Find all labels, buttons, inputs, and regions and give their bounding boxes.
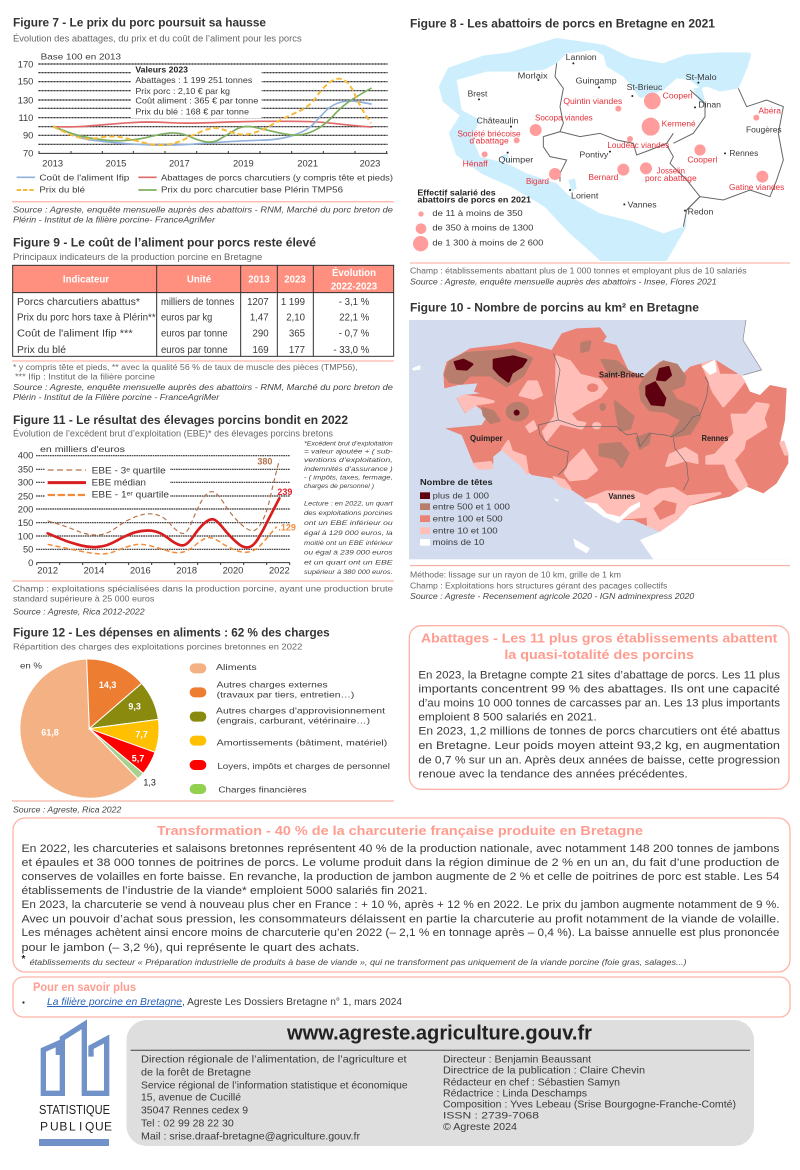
- map: abattoirs: Abéra: [758, 106, 781, 116]
- legend: nombre de têtes: plus de 1 000: [433, 490, 489, 500]
- heading: figure 12: Figure 12 - Les dépenses en aliments : 62 % des charges: [13, 626, 330, 640]
- footnote: transformation: établissements du secteur « Préparation industrielle de produits à base de viande », qui ne transforment pas uniquement de la viande porcine (foie gras, salages...): [30, 958, 687, 967]
- text block: abattages: importants concentrent 99 % des abattages. Ils ont une capacité: [418, 684, 780, 696]
- text block: crédits: ISSN : 2739-7068: [443, 1111, 539, 1122]
- map: abattoirs: Cooperl: [687, 154, 717, 164]
- notes: figure 11: Champ : exploitations spécialisées dans la production porcine, ayant une production brute: [13, 585, 394, 594]
- heading: figure 9: Figure 9 - Le coût de l’aliment pour porcs reste élevé: [13, 236, 316, 250]
- line chart: EBE: 300: [18, 478, 33, 488]
- table: indicateurs: Porcs charcutiers abattus*: [17, 297, 140, 308]
- panel: figure 9: [12, 236, 394, 402]
- table: indicateurs: - 3,1 %: [339, 297, 370, 308]
- legend: charges: Charges financières: [218, 785, 307, 795]
- line chart: EBE: 380: [257, 456, 272, 466]
- text block: définition et lecture: supérieur à 380 000 euros.: [304, 569, 393, 576]
- map: abattoirs: Cooperl: [663, 91, 693, 101]
- line chart: EBE: 0: [28, 558, 33, 568]
- line chart: EBE: 200: [18, 504, 33, 514]
- text block: transformation: [22, 843, 780, 954]
- website url: www.agreste.agriculture.gouv.fr: [286, 1022, 592, 1044]
- map: abattoirs: Société briécoise: [457, 129, 521, 139]
- map: abattoirs: Redon: [688, 206, 714, 216]
- legend: figure 7: Prix du blé: [39, 185, 85, 195]
- line chart: EBE: en milliers d'euros: [40, 444, 126, 454]
- legend: figure 7: Coût de l'aliment Ifip: [39, 172, 130, 182]
- legend: nombre de têtes: entre 10 et 100: [433, 525, 498, 535]
- legend: charges: Autres charges externes: [217, 679, 328, 689]
- map: abattoirs: Hénaff: [463, 159, 488, 169]
- table: indicateurs: Prix du blé: [17, 345, 66, 356]
- text block: adresse: Tel : 02 99 28 22 30: [141, 1117, 234, 1129]
- legend: figure 7: Abattages de porcs charcutiers (y compris tête et pieds): [161, 172, 393, 182]
- table: indicateurs: 2022-2023: [331, 281, 378, 292]
- table: indicateurs: 1 199: [281, 297, 305, 308]
- text block: transformation: établissements de l’industrie de la viande* emploient 5000 salariés fin 2021.: [22, 885, 428, 897]
- table: indicateurs: Évolution: [332, 268, 376, 279]
- callout: valeurs 2023: Valeurs 2023: [135, 65, 188, 75]
- heading: figure 11: Figure 11 - Le résultat des élevages porcins bondit en 2022: [13, 413, 348, 427]
- legend: EBE: EBE - 3ᵉ quartile: [92, 466, 166, 476]
- line chart: EBE: 150: [18, 518, 33, 528]
- table: indicateurs: milliers de tonnes: [161, 297, 234, 308]
- source: figure 7: Plérin - Institut de la filière porcine- FranceAgriMer: [13, 215, 215, 224]
- notes: figure 9: Source : Agreste, enquête mensuelle auprès des abattoirs - RNM, Marché du porc breton de: [13, 383, 394, 392]
- notes: figure 8: Source : Agreste, enquête mensuelle auprès des abattoirs - Insee, Flores 2021: [410, 277, 717, 286]
- legend: figure 7: Prix du porc charcutier base Plérin TMP56: [161, 185, 343, 195]
- text block: adresse: Direction régionale de l’alimentation, de l’agriculture et: [141, 1054, 407, 1066]
- map: abattoirs: porc abattage: [645, 173, 697, 183]
- text block: crédits: [443, 1054, 736, 1133]
- notes: figure 11: [13, 585, 394, 616]
- line chart: EBE: 250: [18, 491, 33, 501]
- map: abattoirs: Kermené: [662, 119, 696, 129]
- legend: effectif salarié: [413, 187, 544, 251]
- table: indicateurs: [13, 265, 394, 356]
- line chart: price index: 130: [18, 95, 33, 105]
- panel: figure 11: [12, 413, 394, 616]
- line chart: price index: 2021: [297, 159, 318, 169]
- notes: figure 8: [410, 266, 747, 286]
- map: abattoirs: Bernard: [588, 172, 619, 182]
- legend: charges: Autres charges d'approvisionnement: [216, 705, 386, 715]
- map: abattoirs: Brest: [468, 89, 488, 99]
- legend: charges: Amortissements (bâtiment, matériel): [217, 737, 387, 747]
- legend: nombre de têtes: entre 500 et 1 000: [433, 501, 510, 511]
- text block: adresse: de la forêt de Bretagne: [141, 1066, 251, 1078]
- map: abattoirs: Châteaulin: [477, 115, 519, 125]
- text block: définition et lecture: égal à 129 000 euros, la: [304, 530, 393, 537]
- text block: abattages: emploient 8 500 salariés en 2021.: [418, 711, 597, 723]
- text block: transformation: Les ménages achètent ainsi encore moins de charcuterie qu’en 2022 (– 2,1 % en tonnage après – 0,4 %). La baisse annuelle est plus prononcée: [22, 927, 780, 939]
- line chart: price index: 2023: [360, 159, 380, 169]
- pie chart: charges: 5,7: [132, 753, 144, 763]
- text block: abattages: En 2023, la Bretagne compte 21 sites d’abattage de porcs. Les 11 plus: [418, 669, 780, 681]
- logo: statistique publique: [39, 1024, 112, 1146]
- text block: abattages: d’au moins 10 000 tonnes de carcasses par an. Les 13 plus importants: [418, 698, 780, 710]
- legend: effectif salarié: de 1 300 à moins de 2 600: [432, 238, 544, 248]
- pie chart: charges: 7,7: [135, 729, 148, 739]
- legend: nombre de têtes: entre 100 et 500: [433, 513, 503, 523]
- panel: figure 12: [12, 626, 394, 814]
- panel: figure 8: [410, 16, 790, 286]
- text block: adresse: [141, 1054, 408, 1142]
- line chart: EBE: 400: [18, 451, 33, 461]
- table: indicateurs: - 33,0 %: [333, 345, 370, 356]
- text block: définition et lecture: ventions d’exploitation,: [304, 457, 393, 464]
- legend: effectif salarié: Effectif salarié des: [417, 187, 496, 197]
- map: abattoirs: Dinan: [698, 100, 721, 110]
- text block: définition et lecture: et un quart ont un EBE: [304, 559, 393, 566]
- line chart: price index: 2013: [42, 159, 63, 169]
- map: abattoirs: Gatine viandes: [729, 182, 784, 192]
- callout: valeurs 2023: [135, 65, 259, 116]
- text block: définition et lecture: *Excédent brut d’exploitation: [304, 441, 393, 448]
- legend: EBE: [48, 466, 169, 500]
- text block: transformation: et épaules et 38 000 tonnes de poitrines de porcs. Le volume produit dans la région diminue de 2 % en un an, du fait d’une production de: [22, 857, 780, 869]
- map: abattoirs: Lorient: [571, 190, 599, 200]
- line chart: EBE: 2016: [130, 565, 151, 575]
- map: abattoirs: Josselin: [657, 165, 685, 175]
- reference link: La filière porcine en Bretagne: [47, 996, 182, 1008]
- text block: abattages: renoue avec la tendance des années précédentes.: [418, 768, 688, 780]
- line chart: price index: [18, 51, 388, 169]
- table: indicateurs: 1,47: [250, 313, 269, 324]
- legend: EBE: EBE - 1ᵉʳ quartile: [92, 490, 169, 500]
- heading: transformation: Transformation - 40 % de la charcuterie française produite en Bretagne: [157, 823, 643, 838]
- text block: abattages: de 0,7 % sur un an. Après deux années de baisse, cette progression: [418, 754, 780, 766]
- notes: figure 10: Source : Agreste - Recensement agricole 2020 - IGN adminexpress 2020: [410, 592, 695, 601]
- line chart: EBE: 100: [18, 531, 33, 541]
- line chart: price index: 150: [18, 77, 33, 87]
- heading: figure 7: Figure 7 - Le prix du porc poursuit sa hausse: [13, 16, 266, 30]
- text block: transformation: En 2022, les charcuteries et salaisons bretonnes représentent 40 % de la production nationale, avec notamment 148 200 tonnes de jambons: [22, 843, 780, 855]
- text block: crédits: Rédacteur en chef : Sébastien Samyn: [443, 1076, 620, 1088]
- notes: figure 11: Source : Agreste, Rica 2012-2022: [13, 607, 145, 616]
- text block: définition et lecture: ont un EBE inférieur ou: [304, 520, 393, 527]
- map: abattoirs: Bigard: [526, 176, 549, 186]
- table: indicateurs: 1207: [247, 297, 269, 308]
- notes: figure 8: Champ : établissements abattant plus de 1 000 tonnes et employant plus de 10 salariés: [410, 266, 747, 275]
- panel: abattages: [409, 626, 789, 789]
- legend: charges: Loyers, impôts et charges de personnel: [217, 761, 390, 771]
- footnote: transformation: *: [22, 954, 26, 965]
- logo: statistique publique: STATISTIQUE: [39, 1102, 110, 1117]
- notes: figure 9: *** Ifip : Institut de la filière porcine: [15, 372, 156, 381]
- panel: transformation: [13, 818, 790, 972]
- table: indicateurs: 22,1 %: [339, 313, 370, 324]
- line chart: EBE: 2014: [84, 565, 104, 575]
- map: abattoirs: [442, 41, 784, 258]
- line chart: EBE: [18, 444, 296, 575]
- map: abattoirs: Guingamp: [576, 75, 617, 85]
- panel: figure 10: [409, 301, 790, 601]
- text block: transformation: Avec un pouvoir d’achat sous pression, les consommateurs délaissent en partie la charcuterie au profit notamment de la viande de volaille.: [22, 913, 780, 925]
- text block: définition et lecture: charges de personnel ): [304, 483, 374, 490]
- legend: charges: (travaux par tiers, entretien…): [217, 689, 354, 699]
- text block: abattages: En 2023, 1,2 millions de tonnes de porcs charcutiers ont été abattus: [418, 725, 780, 737]
- text block: abattages: [418, 669, 780, 780]
- heading: abattages: Abattages - Les 11 plus gros établissements abattent: [421, 632, 778, 646]
- map: abattoirs: Lannion: [566, 52, 597, 62]
- text block: transformation: En 2023, la charcuterie se vend à nouveau plus cher en France : + 10 %, après + 12 % en 2022. Le prix du jambon augmente notamment de 9 %.: [22, 899, 780, 911]
- table: indicateurs: euros par tonne: [161, 345, 228, 356]
- table: indicateurs: - 0,7 %: [339, 329, 370, 340]
- text block: adresse: 35047 Rennes cedex 9: [141, 1104, 248, 1116]
- heading: abattages: [421, 632, 778, 662]
- notes: figure 11: standard supérieure à 25 000 euros: [13, 595, 154, 604]
- table: indicateurs: Coût de l'aliment Ifip ***: [17, 329, 133, 340]
- heading: pour en savoir plus: Pour en savoir plus: [33, 982, 136, 994]
- text block: définition et lecture: Lecture : en 2022, un quart: [304, 501, 394, 508]
- logo: statistique publique: PUBLIQUE: [40, 1120, 112, 1134]
- subtitle: figure 7: Évolution des abattages, du prix et du coût de l’aliment pour les porcs: [13, 33, 302, 43]
- table: indicateurs: Prix du porc hors taxe à Plérin**: [17, 313, 156, 324]
- table: indicateurs: 2,10: [286, 313, 305, 324]
- reference link: [22, 996, 402, 1008]
- map: abattoirs: Morlaix: [518, 70, 549, 80]
- text block: définition et lecture: = valeur ajoutée + ( sub-: [304, 449, 394, 456]
- map: densité porcine: Vannes: [608, 492, 636, 501]
- text block: adresse: Mail : srise.draaf-bretagne@agriculture.gouv.fr: [141, 1130, 360, 1142]
- text block: transformation: conserves de volailles en forte baisse. En revanche, la production de jambon augmente de 2 % et celle de poitrines de porc est stable. Les 54: [22, 871, 780, 883]
- text block: adresse: 15, avenue de Cucillé: [141, 1092, 241, 1104]
- pie chart: charges: 1,3: [143, 778, 156, 788]
- map: abattoirs: Pontivy: [579, 150, 609, 160]
- notes: figure 10: Champ : Exploitations hors structures gérant des pacages collectifs: [410, 581, 667, 590]
- text block: crédits: Composition : Yves Lebeau (Srise Bourgogne-Franche-Comté): [443, 1099, 736, 1111]
- line chart: price index: 2019: [233, 159, 254, 169]
- table: indicateurs: Unité: [187, 275, 212, 286]
- text block: crédits: Rédactrice : Linda Deschamps: [443, 1088, 587, 1100]
- panel: pour en savoir plus: [13, 977, 790, 1017]
- line chart: price index: 2015: [106, 159, 126, 169]
- line chart: EBE: .129: [278, 523, 296, 533]
- legend: charges: [190, 662, 390, 795]
- line chart: EBE: 2020: [223, 565, 243, 575]
- legend: EBE: EBE médian: [92, 478, 146, 488]
- legend: charges: Aliments: [216, 662, 257, 672]
- text block: abattages: en Bretagne. Leur poids moyen atteint 93,2 kg, en augmentation: [418, 740, 780, 752]
- table: indicateurs: Indicateur: [63, 275, 109, 286]
- text block: définition et lecture: - ( impôts, taxes, fermage,: [304, 474, 393, 481]
- callout: valeurs 2023: Prix du blé : 168 € par tonne: [135, 106, 249, 116]
- map: densité porcine: Saint-Brieuc: [599, 371, 645, 380]
- map: abattoirs: Rennes: [729, 148, 758, 158]
- legend: effectif salarié: de 350 à moins de 1300: [432, 223, 534, 233]
- table: indicateurs: 365: [289, 329, 305, 340]
- pie chart: charges: 14,3: [99, 680, 116, 690]
- map: densité porcine: Rennes: [702, 434, 729, 443]
- callout: valeurs 2023: Prix porc : 2,10 € par kg: [135, 86, 230, 96]
- source: figure 12: Source : Agreste, Rica 2022: [13, 805, 122, 814]
- line chart: price index: Base 100 en 2013: [41, 51, 121, 61]
- legend: effectif salarié: abattoirs de porcs en 2021: [417, 195, 531, 205]
- footnote: transformation: [22, 954, 687, 967]
- table: indicateurs: 2013: [248, 275, 270, 286]
- line chart: price index: 70: [23, 149, 33, 159]
- table: indicateurs: 177: [289, 345, 305, 356]
- map: densité porcine: [409, 320, 790, 559]
- legend: nombre de têtes: moins de 10: [433, 537, 485, 547]
- line chart: EBE: 2022: [269, 565, 290, 575]
- reference link: , Agreste Les Dossiers Bretagne n° 1, mars 2024: [182, 996, 402, 1008]
- line chart: price index: 90: [23, 131, 33, 141]
- map: abattoirs: Loudéac viandes: [607, 140, 669, 150]
- text block: crédits: Directeur : Benjamin Beaussant: [443, 1054, 591, 1066]
- text block: définition et lecture: des exploitations porcines: [304, 510, 393, 517]
- map: abattoirs: d'abattage: [469, 135, 509, 145]
- notes: figure 10: [410, 571, 695, 601]
- source: figure 7: [13, 205, 394, 224]
- legend: effectif salarié: de 11 à moins de 350: [432, 208, 523, 218]
- map: abattoirs: St-Malo: [686, 72, 717, 82]
- heading: figure 10: Figure 10 - Nombre de porcins au km² en Bretagne: [410, 301, 699, 315]
- subtitle: figure 9: Principaux indicateurs de la production porcine en Bretagne: [13, 252, 262, 262]
- notes: figure 9: [13, 363, 394, 402]
- table: indicateurs: 169: [253, 345, 269, 356]
- text block: définition et lecture: [304, 441, 394, 576]
- map: abattoirs: Socopa viandes: [535, 113, 593, 123]
- text block: définition et lecture: ou égal à 239 000 euros: [304, 550, 393, 557]
- text block: crédits: © Agreste 2024: [443, 1121, 517, 1133]
- text block: adresse: Service régional de l’information statistique et économique: [141, 1079, 408, 1091]
- map: abattoirs: Quimper: [498, 155, 534, 165]
- line chart: EBE: 350: [18, 465, 33, 475]
- map: abattoirs: Quintin viandes: [563, 96, 622, 106]
- heading: abattages: la quasi-totalité des porcins: [504, 648, 694, 662]
- callout: valeurs 2023: Coût aliment : 365 € par tonne: [135, 95, 259, 105]
- text block: transformation: pour le jambon (– 3,2 %), qui représente le quart des achats.: [22, 942, 360, 954]
- legend: figure 7: [17, 172, 393, 195]
- line chart: price index: 110: [18, 113, 33, 123]
- source: figure 7: Source : Agreste, enquête mensuelle auprès des abattoirs - RNM, Marché du porc breton de: [13, 205, 394, 214]
- panel: figure 12: en %: [20, 660, 42, 670]
- table: indicateurs: euros par tonne: [161, 329, 228, 340]
- table: indicateurs: 2023: [284, 275, 306, 286]
- pie chart: charges: [20, 659, 159, 798]
- map: abattoirs: Fougères: [746, 124, 782, 134]
- heading: figure 8: Figure 8 - Les abattoirs de porcs en Bretagne en 2021: [410, 16, 715, 30]
- pie chart: charges: 9,3: [128, 702, 141, 712]
- subtitle: figure 12: Répartition des charges des exploitations porcines bretonnes en 2022: [13, 641, 303, 651]
- table: indicateurs: euros par kg: [161, 313, 212, 324]
- line chart: price index: 2017: [169, 159, 190, 169]
- map: abattoirs: St-Brieuc: [627, 82, 662, 92]
- map: abattoirs: Vannes: [628, 200, 657, 210]
- pie chart: charges: 61,8: [41, 728, 59, 738]
- panel: figure 7: [12, 16, 394, 224]
- notes: figure 10: Méthode: lissage sur un rayon de 10 km, grille de 1 km: [410, 571, 621, 580]
- table: indicateurs: 290: [253, 329, 269, 340]
- panel: footer: [126, 1020, 754, 1146]
- legend: nombre de têtes: [420, 477, 510, 547]
- line chart: EBE: 2012: [37, 565, 58, 575]
- line chart: price index: 170: [18, 59, 33, 69]
- text block: crédits: Directrice de la publication : Claire Chevin: [443, 1065, 645, 1077]
- text block: définition et lecture: moitié ont un EBE inférieur: [304, 540, 394, 547]
- line chart: EBE: 2018: [176, 565, 197, 575]
- text block: définition et lecture: indemnités d’assurance ): [304, 466, 393, 473]
- notes: figure 9: Plérin - Institut de la Filière porcine - FranceAgriMer: [13, 393, 220, 402]
- legend: charges: (engrais, carburant, vétérinaire…): [217, 715, 370, 725]
- map: densité porcine: Quimper: [470, 434, 503, 443]
- line chart: EBE: 239: [277, 487, 292, 497]
- legend: nombre de têtes: Nombre de têtes: [420, 477, 493, 487]
- line chart: EBE: 50: [23, 545, 33, 555]
- subtitle: figure 11: Évolution de l’excédent brut d’exploitation (EBE)* des élevages porcins bretons: [13, 429, 334, 439]
- callout: valeurs 2023: Abattages : 1 199 251 tonnes: [135, 75, 253, 85]
- notes: figure 9: * y compris tête et pieds, ** avec la qualité 56 % de taux de muscle des pièces (TMP56),: [13, 363, 358, 372]
